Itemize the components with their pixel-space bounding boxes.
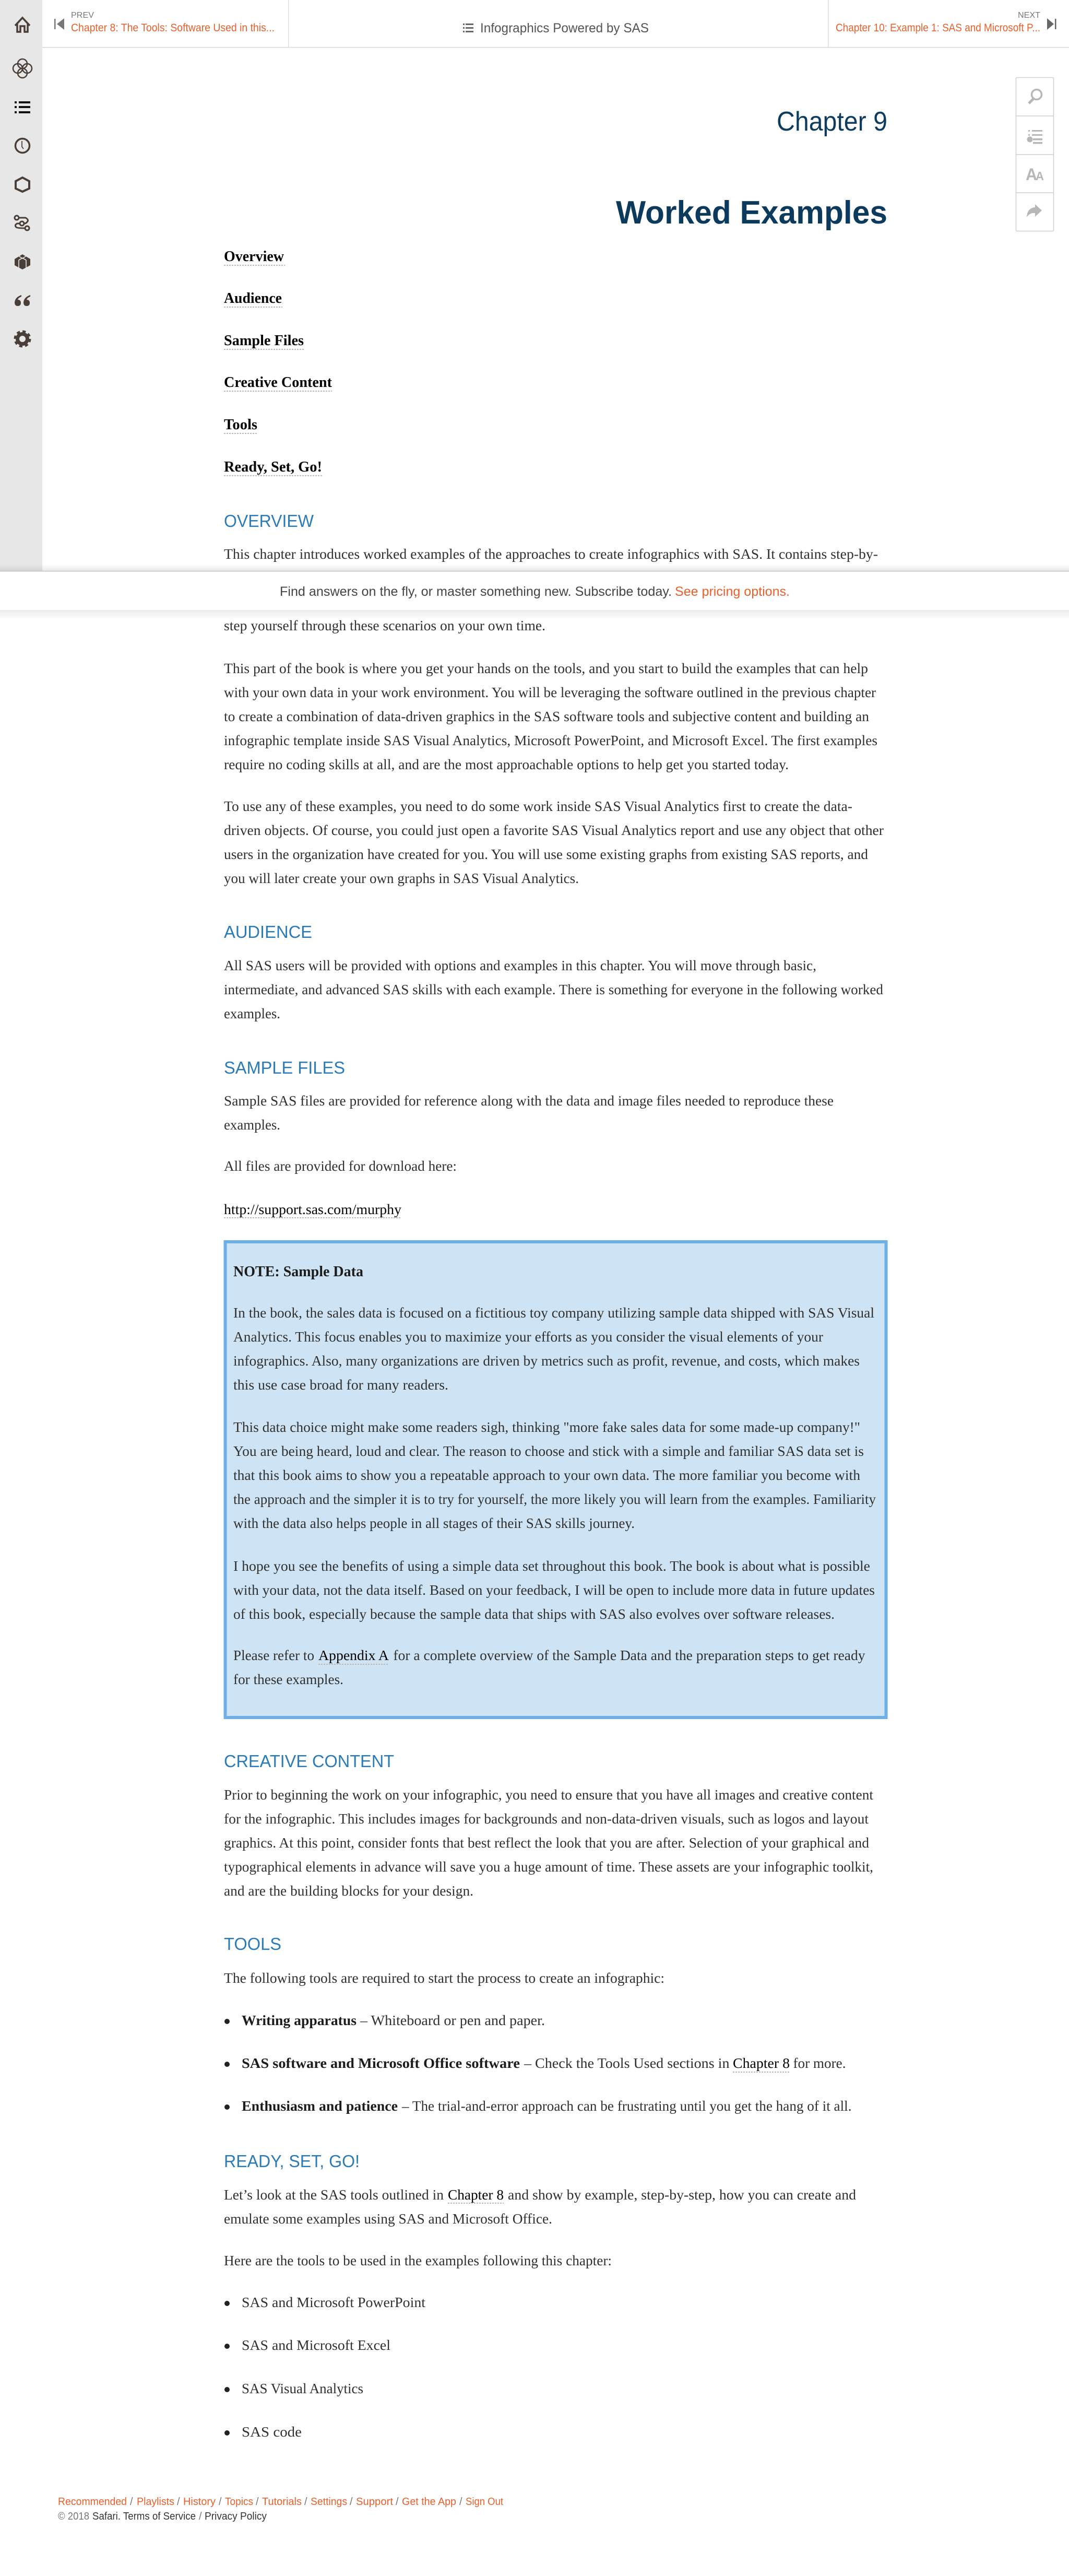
text block: paragraph on hands-on tools: to create a combination of data-driven graphics in the SAS software tools and subjective content and building an xyxy=(224,708,869,724)
icon: clock xyxy=(16,139,29,152)
footer legal xyxy=(58,2511,267,2522)
text block: ready set go xyxy=(224,2186,856,2268)
footer links: Topics xyxy=(225,2496,253,2508)
footer legal: © 2018 xyxy=(58,2511,89,2522)
footer links: / xyxy=(256,2496,259,2508)
text block: sample files: examples. xyxy=(224,1116,280,1133)
note paragraph 1: infographics. Also, many organizations are driven by metrics such as profit, revenue, and costs, which makes xyxy=(233,1352,860,1369)
text block: audience xyxy=(224,957,883,1021)
text block: paragraph on hands-on tools xyxy=(224,660,877,772)
list: required tools: Chapter 8 xyxy=(733,2055,790,2071)
footer links: Support xyxy=(356,2496,393,2508)
text block: creative content: and are the building blocks for your design. xyxy=(224,1883,473,1899)
note paragraph 4: for these examples. xyxy=(233,1671,343,1687)
list: required tools: – The trial-and-error approach can be frustrating until you get the hang of it all. xyxy=(401,2098,852,2114)
table of contents links: Creative Content xyxy=(224,374,332,391)
icon: search xyxy=(1029,90,1042,103)
text block: sample files: Sample SAS files are provided for reference along with the data and image files needed to reproduce these xyxy=(224,1092,834,1109)
footer links: / xyxy=(459,2496,462,2508)
icon: list xyxy=(15,101,30,113)
text block: overview continued: step yourself through these scenarios on your own time. xyxy=(224,617,545,633)
text block: ready set go: and show by example, step-by-step, how you can create and xyxy=(508,2186,856,2203)
text block: creative content: typographical elements in advance will save you a huge amount of time. These assets are your infographic toolkit, xyxy=(224,1859,873,1875)
note paragraph 1 xyxy=(233,1304,874,1393)
next chapter link: Chapter 10: Example 1: SAS and Microsoft P... xyxy=(836,22,1040,34)
text block: creative content: Prior to beginning the work on your infographic, you need to ensure that you have all images and creative content xyxy=(224,1786,873,1803)
footer links: / xyxy=(219,2496,222,2508)
text block: ready set go: Here are the tools to be used in the examples following this chapter: xyxy=(224,2252,612,2268)
text block: paragraph on using examples: To use any of these examples, you need to do some work inside SAS Visual Analytics first to create the data- xyxy=(224,798,852,814)
note paragraph 2: that this book aims to show you a repeatable approach to your own data. The more familiar you become with xyxy=(233,1467,860,1483)
table of contents links: Overview xyxy=(224,249,284,265)
icon: next xyxy=(1047,18,1056,30)
text block: creative content: for the infographic. This includes images for backgrounds and non-data-driven visuals, such as logos and layout xyxy=(224,1810,869,1827)
footer links: / xyxy=(130,2496,133,2508)
text block: sample files xyxy=(224,1092,834,1174)
link: download url: http://support.sas.com/murphy xyxy=(224,1201,401,1217)
previous chapter link: Chapter 8: The Tools: Software Used in this... xyxy=(71,22,275,34)
text block: tools intro: The following tools are required to start the process to create an infographic: xyxy=(224,1970,664,1986)
icon: text size: A xyxy=(1036,169,1044,183)
icon: box xyxy=(15,254,30,269)
heading: audience: AUDIENCE xyxy=(224,922,312,942)
text block: paragraph on hands-on tools: with your own data in your work environment. You will be leveraging the software outlined in the previous chapter xyxy=(224,684,876,700)
note paragraph 3: I hope you see the benefits of using a simple data set throughout this book. The book is about what is possible xyxy=(233,1558,870,1574)
heading: creative content: CREATIVE CONTENT xyxy=(224,1751,394,1771)
text block: creative content xyxy=(224,1786,873,1899)
list: required tools: Writing apparatus xyxy=(242,2012,357,2028)
footer links: / xyxy=(396,2496,399,2508)
note paragraph 3: with your data, not the data itself. Based on your feedback, I will be open to include more data in future updates xyxy=(233,1582,875,1598)
book title: Infographics Powered by SAS xyxy=(480,21,649,36)
footer links: / xyxy=(304,2496,307,2508)
panel: note on sample data xyxy=(225,1242,886,1718)
note paragraph 4: Please refer to xyxy=(233,1647,314,1663)
icon: nodes xyxy=(15,216,29,230)
icon: home xyxy=(15,18,30,32)
note paragraph 4: for a complete overview of the Sample Data and the preparation steps to get ready xyxy=(394,1647,865,1663)
panel: left sidebar xyxy=(0,0,42,571)
list: example tools xyxy=(224,2294,425,2440)
note paragraph 2 xyxy=(233,1419,876,1531)
text block: overview intro: This chapter introduces worked examples of the approaches to create infographics with SAS. It contains step-by- xyxy=(224,546,878,562)
footer links: History xyxy=(183,2496,216,2508)
footer links: Get the App xyxy=(402,2496,456,2508)
icon: flower xyxy=(13,59,32,78)
footer links: / xyxy=(177,2496,180,2508)
table of contents links: Audience xyxy=(224,290,282,307)
list: required tools: SAS software and Microsoft Office software xyxy=(242,2055,520,2071)
note paragraph 4 xyxy=(233,1647,865,1687)
heading: sample files: SAMPLE FILES xyxy=(224,1058,345,1077)
text block: ready set go: emulate some examples using SAS and Microsoft Office. xyxy=(224,2210,552,2227)
panel: reading toolbar xyxy=(1016,77,1053,231)
text block: ready set go: Chapter 8 xyxy=(448,2186,504,2203)
chapter label: Chapter 9 xyxy=(777,107,887,137)
icon: table of contents xyxy=(463,23,473,32)
text block: paragraph on hands-on tools: infographic template inside SAS Visual Analytics, Microsoft PowerPoint, and Microsoft Excel. The first examples xyxy=(224,732,877,748)
text block: paragraph on using examples: driven objects. Of course, you could just open a favorite SAS Visual Analytics report and use any object that other xyxy=(224,822,884,838)
note paragraph 4: Appendix A xyxy=(318,1647,389,1663)
subscribe banner: Find answers on the fly, or master something new. Subscribe today. xyxy=(280,584,672,599)
subscribe banner xyxy=(0,564,1069,619)
list: example tools: SAS code xyxy=(242,2424,302,2440)
text block: audience: All SAS users will be provided with options and examples in this chapter. You will move through basic, xyxy=(224,957,816,973)
icon: hexagon xyxy=(16,178,29,192)
footer xyxy=(58,2496,503,2522)
list: example tools: SAS and Microsoft PowerPoint xyxy=(242,2294,425,2310)
footer links: Recommended xyxy=(58,2496,127,2508)
list: required tools: for more. xyxy=(793,2055,846,2071)
footer links: Tutorials xyxy=(262,2496,302,2508)
title: Worked Examples xyxy=(616,195,887,231)
footer legal: Privacy Policy xyxy=(205,2511,267,2522)
list: example tools: SAS and Microsoft Excel xyxy=(242,2337,390,2353)
text block: paragraph on using examples xyxy=(224,798,884,886)
note paragraph 2: This data choice might make some readers sigh, thinking "more fake sales data for some made-up company!" xyxy=(233,1419,860,1435)
icon: text size: A xyxy=(1026,165,1037,184)
text block: sample files: All files are provided for download here: xyxy=(224,1158,457,1174)
list: example tools: SAS Visual Analytics xyxy=(242,2380,363,2396)
note paragraph 1: In the book, the sales data is focused on a fictitious toy company utilizing sample data shipped with SAS Visual xyxy=(233,1304,874,1321)
note paragraph 2: with the data also helps people in all stages of their SAS skills journey. xyxy=(233,1515,635,1531)
footer links: Playlists xyxy=(137,2496,174,2508)
note paragraph 2: the approach and the simpler it is to try for yourself, the more likely you will learn from the examples. Familiarity xyxy=(233,1491,876,1507)
text block: paragraph on using examples: users in the organization have created for you. You will use some existing graphs from existing SAS reports, and xyxy=(224,846,868,862)
table of contents links: Ready, Set, Go! xyxy=(224,459,322,475)
table of contents links xyxy=(224,249,332,476)
icon: previous xyxy=(54,18,64,30)
icon: add to list xyxy=(1027,130,1042,144)
text block: ready set go: Let’s look at the SAS tools outlined in xyxy=(224,2186,444,2203)
footer links xyxy=(58,2496,503,2508)
heading: tools: TOOLS xyxy=(224,1934,281,1954)
next label: NEXT xyxy=(1018,11,1040,20)
icon: gear xyxy=(15,332,30,346)
note heading: NOTE: Sample Data xyxy=(233,1264,363,1280)
heading: overview: OVERVIEW xyxy=(224,511,314,531)
footer links: / xyxy=(350,2496,353,2508)
text block: paragraph on hands-on tools: This part of the book is where you get your hands on the tools, and you start to build the examples that can help xyxy=(224,660,868,676)
footer legal: Safari. Terms of Service xyxy=(92,2511,196,2522)
list: required tools: Enthusiasm and patience xyxy=(242,2098,398,2114)
footer legal: / xyxy=(199,2511,202,2522)
previous label: PREV xyxy=(71,11,94,20)
text block: creative content: graphics. At this point, consider fonts that best reflect the look that you are after. Selection of your graphical and xyxy=(224,1834,869,1851)
icon: text size xyxy=(1026,165,1044,184)
table of contents links: Sample Files xyxy=(224,333,304,349)
panel: top navigation xyxy=(42,0,1069,48)
footer links: Settings xyxy=(311,2496,347,2508)
list: required tools: – Whiteboard or pen and paper. xyxy=(360,2012,545,2028)
note paragraph 1: Analytics. This focus enables you to maximize your efforts as you consider the visual elements of your xyxy=(233,1328,823,1345)
heading: ready set go: READY, SET, GO! xyxy=(224,2151,360,2171)
icon: quote xyxy=(15,295,30,306)
icon: share xyxy=(1027,204,1042,217)
note paragraph 1: this use case broad for many readers. xyxy=(233,1377,448,1393)
text block: audience: examples. xyxy=(224,1005,280,1021)
list: required tools: – Check the Tools Used sections in xyxy=(524,2055,730,2071)
subscribe banner: See pricing options. xyxy=(675,584,790,599)
text block: audience: intermediate, and advanced SAS skills with each example. There is something for everyone in the following worked xyxy=(224,981,883,997)
list: required tools xyxy=(224,2012,852,2114)
note paragraph 3 xyxy=(233,1558,875,1622)
note paragraph 3: of this book, especially because the sample data that ships with SAS also evolves over software releases. xyxy=(233,1606,835,1622)
text block: paragraph on using examples: you will later create your own graphs in SAS Visual Analytics. xyxy=(224,870,579,886)
table of contents links: Tools xyxy=(224,417,257,433)
text block: paragraph on hands-on tools: require no coding skills at all, and are the most approachable options to help get you started today. xyxy=(224,756,789,772)
footer links: Sign Out xyxy=(466,2496,503,2508)
note paragraph 2: You are being heard, loud and clear. The reason to choose and stick with a simple and familiar SAS data set is xyxy=(233,1443,864,1459)
